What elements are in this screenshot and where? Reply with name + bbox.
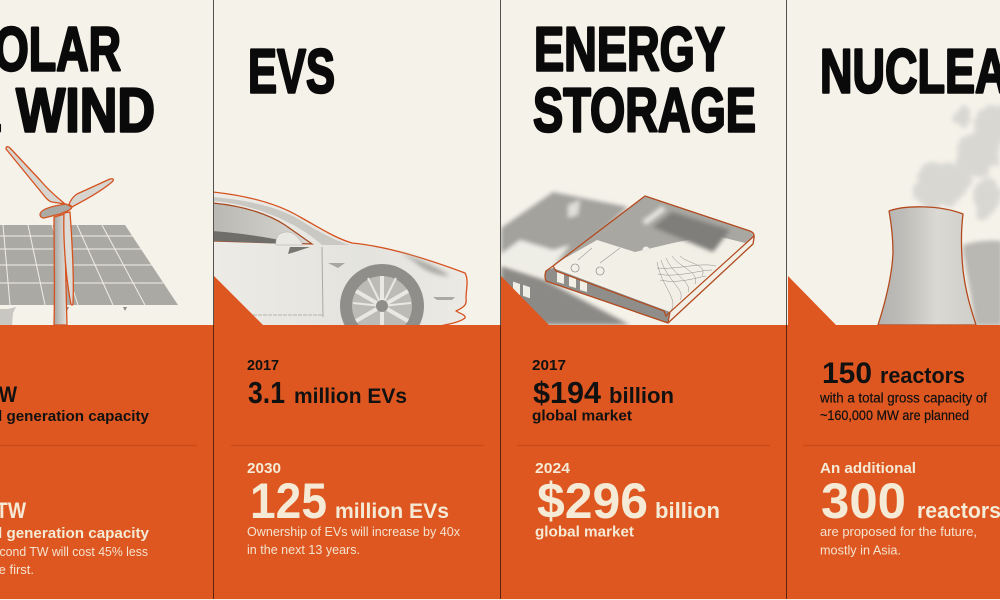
- heading: solar and wind: [0, 16, 155, 146]
- cream upper background: [0, 0, 1000, 325]
- heading: energy storage: STORAGE: [533, 76, 756, 146]
- stat: storage market in 2024: global market: [535, 524, 634, 540]
- illustration: smoke plume: [913, 105, 1000, 219]
- stat: EVs in 2030: 2030: [247, 460, 281, 477]
- heading: energy storage: [533, 16, 756, 146]
- orange corner triangles: [214, 276, 836, 325]
- stat: storage market in 2017: 2017: [532, 357, 566, 374]
- panel: nuclear: [819, 38, 1000, 558]
- panel: energy storage: [501, 16, 756, 540]
- panel: solar and wind: [0, 16, 178, 577]
- stat: proposed reactors: [820, 460, 1000, 558]
- vertical panel dividers: [214, 0, 786, 599]
- illustration: wind turbine: [6, 147, 113, 325]
- stat: EVs in 2017: million EVs: [294, 385, 407, 408]
- stat: storage market in 2017: global market: [532, 408, 632, 424]
- stat: planned reactors: with a total gross capacity of: [819, 390, 987, 406]
- stat: EVs in 2017: 2017: [247, 357, 279, 374]
- stat: planned reactors: reactors: [880, 363, 965, 388]
- stat: storage market in 2024: $296: [537, 473, 648, 529]
- stat: proposed reactors: are proposed for the future,: [820, 524, 977, 539]
- stat: second terawatt: [0, 498, 150, 577]
- illustration: electric car: [214, 192, 468, 325]
- stat: storage market in 2024: 2024: [535, 460, 571, 477]
- stat: proposed reactors: 300: [821, 473, 906, 529]
- heading: energy storage: ENERGY: [534, 16, 725, 84]
- stat: storage market in 2017: $194: [533, 375, 602, 410]
- stat: first terawatt: [0, 382, 150, 425]
- stat: EVs in 2030: in the next 13 years.: [247, 542, 360, 557]
- stat: proposed reactors: mostly in Asia.: [820, 542, 901, 558]
- stat: EVs in 2030: Ownership of EVs will increase by 40x: [247, 524, 460, 539]
- horizontal rules: [0, 444, 1000, 446]
- stat: EVs in 2030: [247, 460, 460, 557]
- stat: planned reactors: ~160,000 MW are planned: [820, 408, 969, 423]
- stat: storage market in 2024: [535, 460, 720, 540]
- stat: planned reactors: [819, 357, 987, 423]
- heading: EVs: EVS: [248, 38, 335, 106]
- stat: storage market in 2017: [532, 357, 674, 424]
- stat: storage market in 2024: billion: [655, 498, 720, 523]
- stat: EVs in 2030: million EVs: [335, 500, 449, 523]
- illustration: cooling towers: [878, 207, 1000, 326]
- illustration: battery: [501, 192, 754, 325]
- stat: EVs in 2017: 3.1: [248, 375, 285, 410]
- stat: storage market in 2017: billion: [609, 383, 674, 408]
- illustration: solar panel: [0, 225, 178, 325]
- stat: EVs in 2017: [247, 357, 407, 410]
- stat: planned reactors: 150: [822, 357, 872, 390]
- stat: proposed reactors: An additional: [820, 460, 916, 477]
- orange lower background: [0, 325, 1000, 599]
- stat: EVs in 2030: 125: [250, 473, 327, 529]
- panel: EVs: [213, 38, 467, 557]
